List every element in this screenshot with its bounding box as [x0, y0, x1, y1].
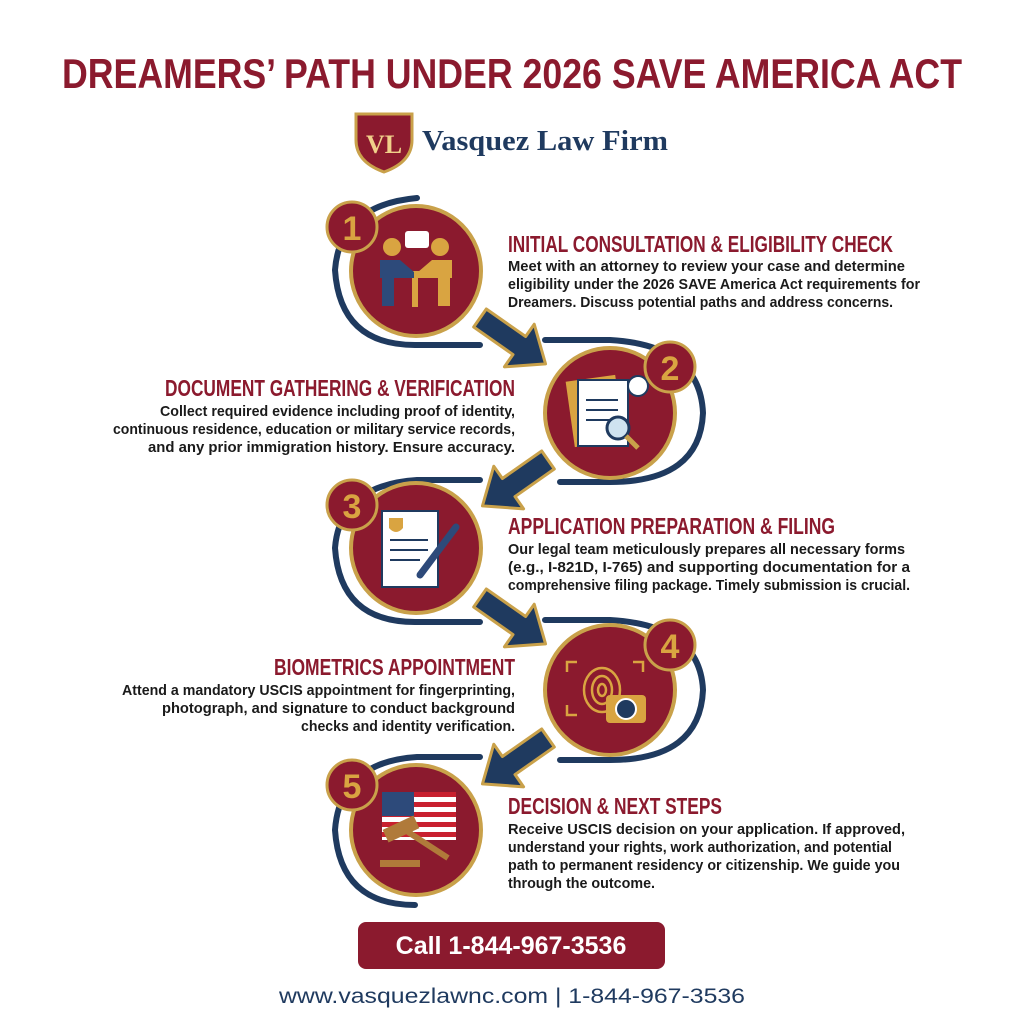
- step 4 text: BIOMETRICS APPOINTMENT: [274, 654, 515, 680]
- step 1 text: INITIAL CONSULTATION & ELIGIBILITY CHECK: [508, 231, 893, 257]
- step 4 text: [122, 654, 515, 735]
- step 3 text: (e.g., I-821D, I-765) and supporting documentation for a: [508, 559, 911, 576]
- step 2 text: and any prior immigration history. Ensure accuracy.: [148, 439, 515, 456]
- step 4 text: Attend a mandatory USCIS appointment for fingerprinting,: [122, 682, 515, 699]
- logo: [356, 114, 668, 172]
- step 2 circle: 2: [661, 350, 679, 388]
- arrows: [465, 297, 563, 805]
- step 5 text: [508, 793, 905, 892]
- step 5 text: through the outcome.: [508, 875, 655, 892]
- step 3 text: comprehensive filing package. Timely submission is crucial.: [508, 577, 910, 594]
- step 5 text: understand your rights, work authorization, and potential: [508, 839, 892, 856]
- call button: [358, 922, 665, 969]
- step 4 text: photograph, and signature to conduct background: [162, 700, 515, 717]
- step 5 text: Receive USCIS decision on your application. If approved,: [508, 821, 905, 838]
- step 1 text: Meet with an attorney to review your case and determine: [508, 258, 905, 275]
- path arcs: [335, 198, 703, 905]
- step 3 text: Our legal team meticulously prepares all necessary forms: [508, 541, 905, 558]
- step 2 text: Collect required evidence including proof of identity,: [160, 403, 515, 420]
- step 5 text: path to permanent residency or citizenship. We guide you: [508, 857, 900, 874]
- step 1 circle: [327, 202, 481, 336]
- step 3 circle: [327, 480, 481, 613]
- step 2 text: continuous residence, education or military service records,: [113, 421, 515, 438]
- step 3 circle: 3: [343, 488, 361, 526]
- step 3 text: APPLICATION PREPARATION & FILING: [508, 513, 835, 539]
- step 1 text: Dreamers. Discuss potential paths and address concerns.: [508, 294, 893, 311]
- step 4 circle: [545, 620, 695, 755]
- step 4 text: checks and identity verification.: [301, 718, 515, 735]
- step 2 text: DOCUMENT GATHERING & VERIFICATION: [165, 375, 515, 401]
- step 1 circle: 1: [343, 210, 361, 248]
- logo: Vasquez Law Firm: [422, 125, 668, 157]
- footer: www.vasquezlawnc.com | 1-844-967-3536: [278, 985, 745, 1008]
- step 3 text: [508, 513, 911, 594]
- step 4 circle: 4: [661, 628, 680, 666]
- step 2 text: [113, 375, 515, 456]
- step 1 text: [508, 231, 920, 311]
- logo: VL: [366, 130, 402, 159]
- step 5 circle: [327, 760, 481, 895]
- step 1 text: eligibility under the 2026 SAVE America Act requirements for: [508, 276, 920, 293]
- step 5 circle: 5: [343, 768, 361, 806]
- step 2 circle: [545, 342, 695, 478]
- step 5 text: DECISION & NEXT STEPS: [508, 793, 722, 819]
- call button: Call 1-844-967-3536: [396, 932, 626, 960]
